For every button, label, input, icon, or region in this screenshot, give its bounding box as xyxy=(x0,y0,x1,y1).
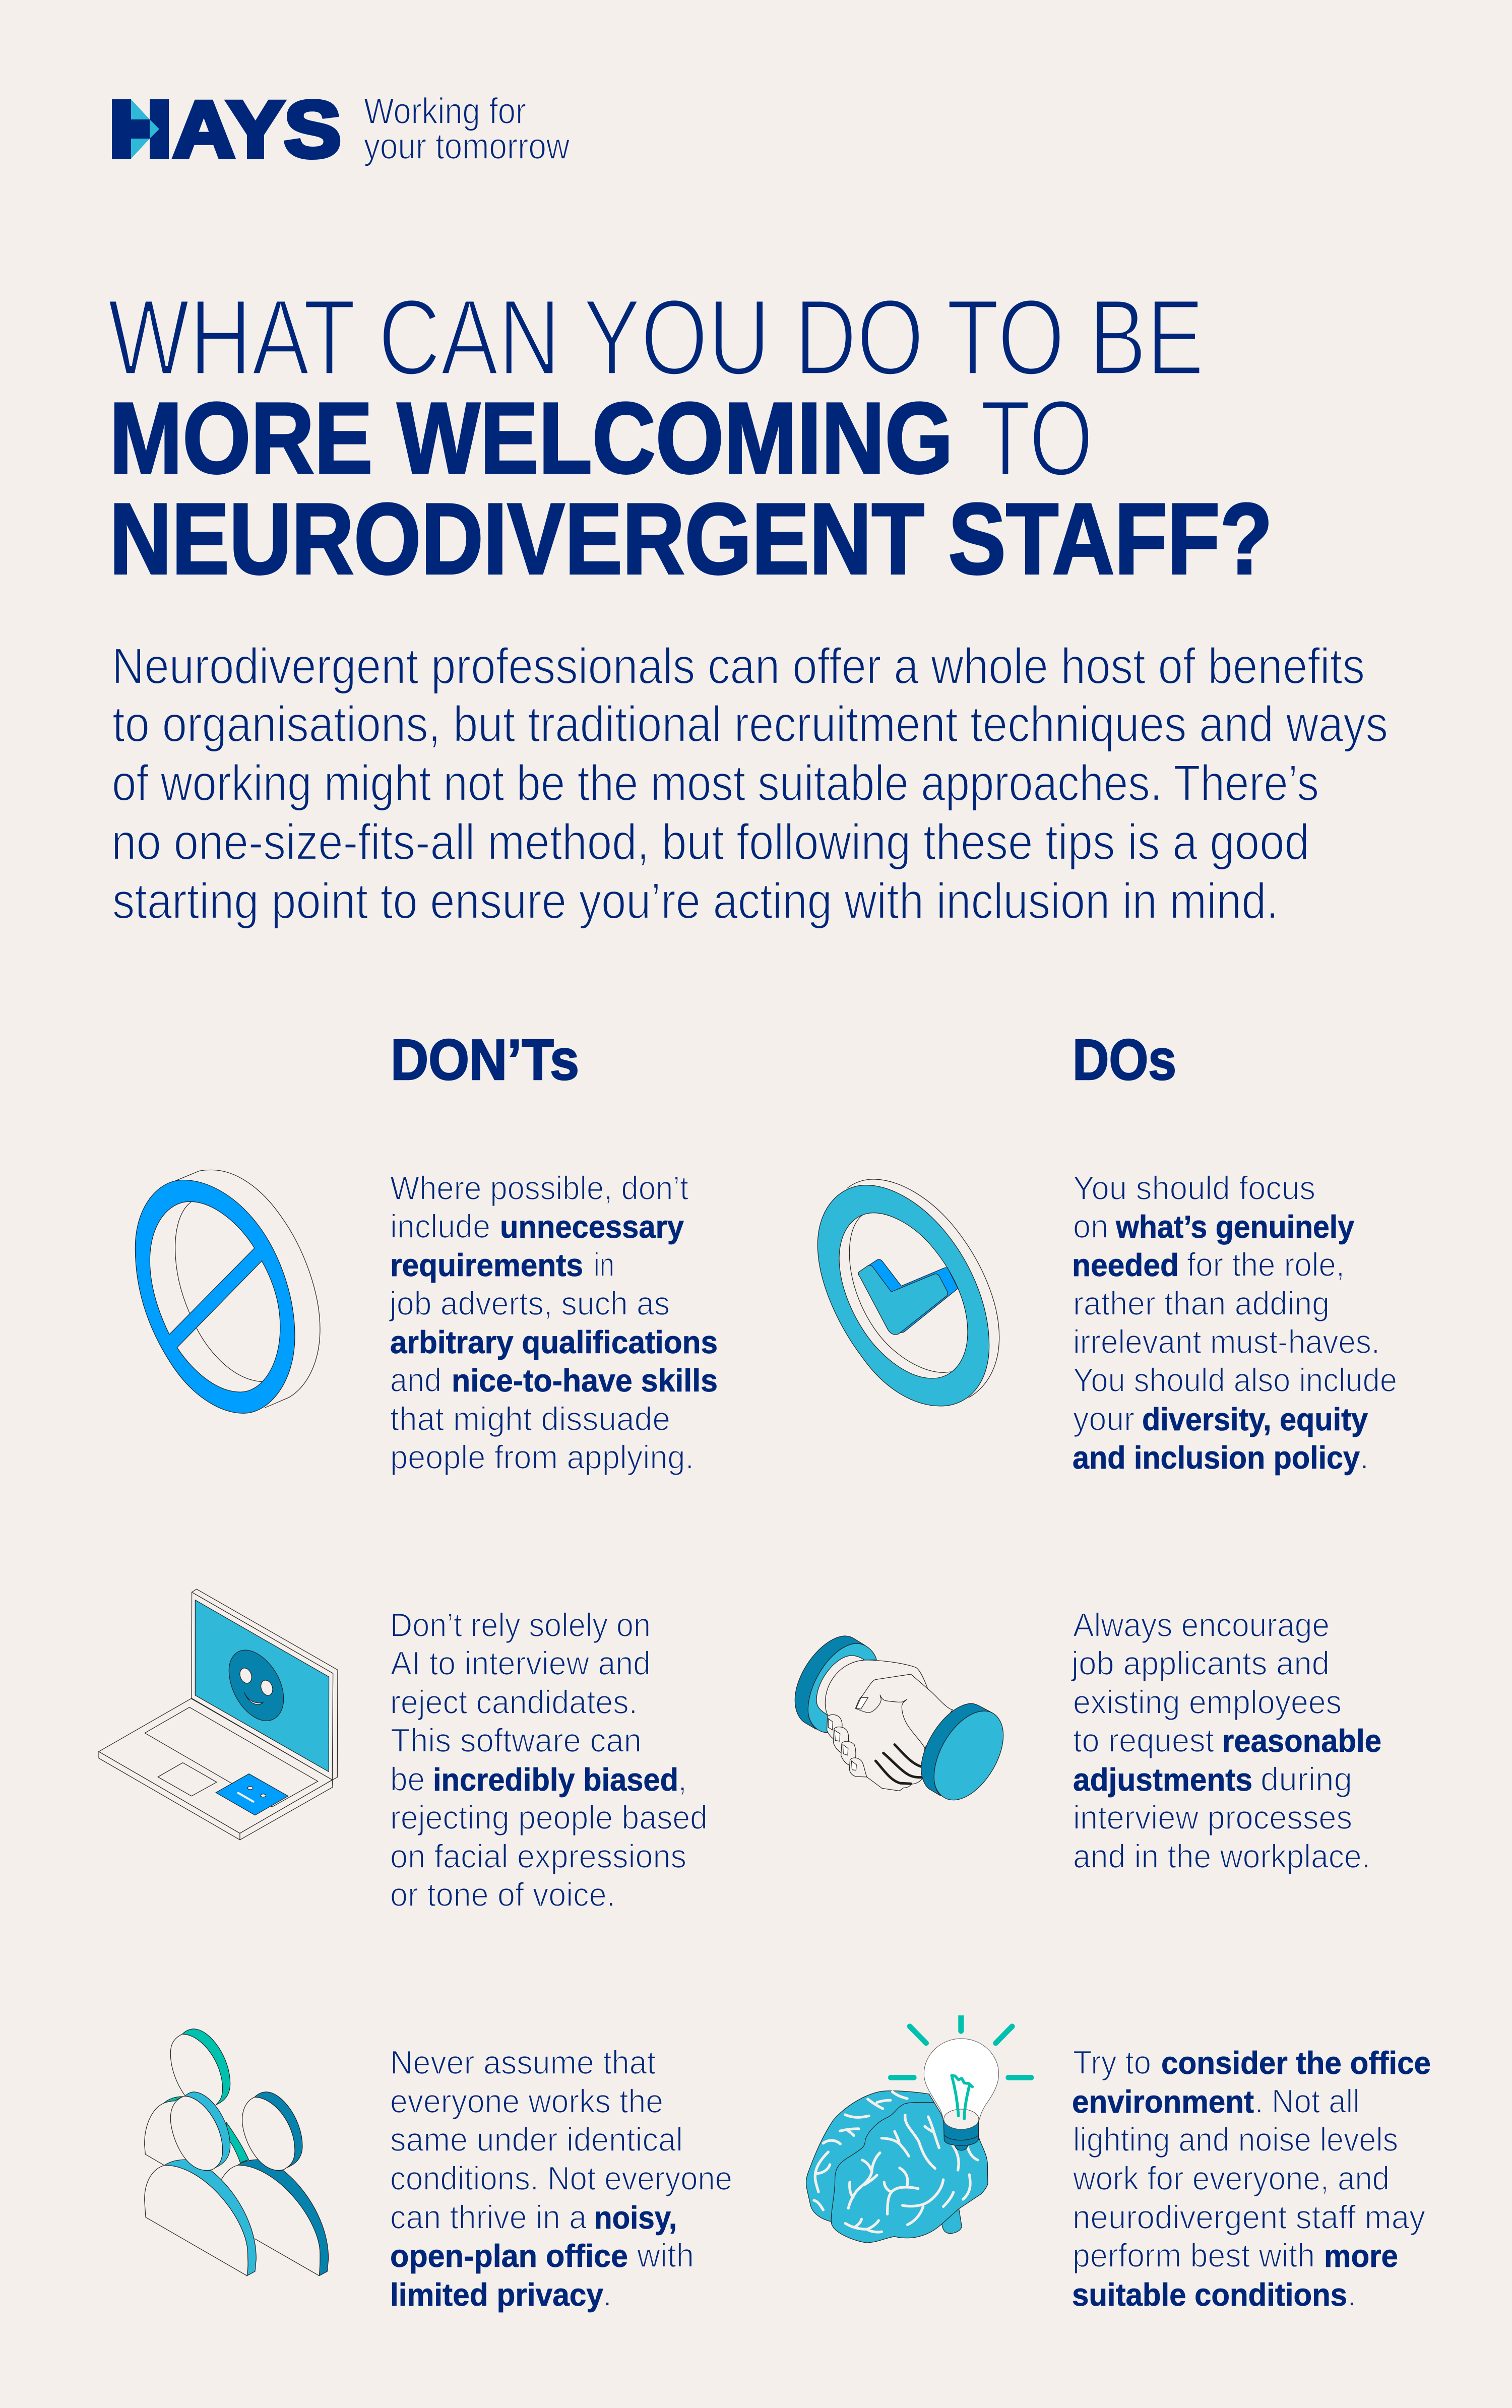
text: do 1: You should also include xyxy=(1073,1362,1397,1399)
text: don't 1: that might dissuade xyxy=(390,1401,670,1437)
text: do 1: needed xyxy=(1072,1248,1179,1283)
text: don't 3: open-plan office xyxy=(390,2239,628,2274)
text: don't 1: and xyxy=(390,1362,442,1399)
logo wordmark: H xyxy=(112,85,169,175)
text: do 1: . xyxy=(1360,1439,1369,1476)
intro paragraph: of working might not be the most suitable approaches. There’s xyxy=(112,755,1319,811)
text: don't 2: be xyxy=(390,1761,425,1798)
text: don't 2: reject candidates. xyxy=(390,1684,638,1721)
text: don't 1: people from applying. xyxy=(390,1439,694,1476)
text: do 3: neurodivergent staff may xyxy=(1073,2199,1425,2236)
text: don't 3: can thrive in a xyxy=(390,2199,587,2236)
text: do 3: perform best with xyxy=(1073,2237,1315,2274)
text: do 2: during xyxy=(1261,1761,1352,1798)
text: do 3: suitable conditions xyxy=(1072,2277,1347,2313)
logo: Hays, working for your tomorrow xyxy=(112,85,570,175)
heading: dos: DOs xyxy=(1073,1028,1176,1092)
text: do 1: rather than adding xyxy=(1073,1285,1330,1322)
text: don't 3: . xyxy=(603,2276,612,2313)
icon: three people xyxy=(145,2029,329,2276)
panel: don't 3, identical conditions xyxy=(145,2029,732,2313)
text: do 3: environment xyxy=(1072,2084,1254,2120)
icon: tick in ring xyxy=(817,1179,999,1406)
text: do 2: existing employees xyxy=(1073,1684,1342,1721)
text: don't 1: arbitrary qualifications xyxy=(390,1325,718,1360)
text: do 1: and inclusion policy xyxy=(1073,1440,1360,1476)
icon: prohibition sign xyxy=(135,1170,320,1413)
text: don't 3: conditions. Not everyone xyxy=(390,2160,732,2197)
text: don't 2: or tone of voice. xyxy=(390,1876,615,1913)
text: don't 3: everyone works the xyxy=(390,2083,663,2120)
light bulb xyxy=(924,2039,999,2150)
text: don't 1: unnecessary xyxy=(500,1210,684,1245)
panel: don't 1, unnecessary requirements xyxy=(135,1170,718,1476)
title xyxy=(108,277,1273,595)
text: do 2: adjustments xyxy=(1073,1762,1252,1798)
text: do 3: Not all xyxy=(1272,2083,1360,2120)
text: do 3: work for everyone, and xyxy=(1073,2160,1390,2197)
text: don't 3: same under identical xyxy=(390,2121,683,2158)
heading: don'ts: DON’Ts xyxy=(391,1028,579,1092)
text: do 2 xyxy=(1070,1607,1381,1875)
text: do 1: on xyxy=(1073,1208,1108,1245)
title: WHAT CAN YOU DO TO BE xyxy=(108,277,1204,398)
text: don't 2: incredibly biased xyxy=(433,1762,678,1798)
title: NEURODIVERGENT STAFF? xyxy=(109,483,1273,595)
logo tagline: your tomorrow xyxy=(364,126,570,167)
text: do 3: more xyxy=(1324,2239,1398,2274)
text: do 3: Try to xyxy=(1073,2044,1151,2081)
panel: do 2, reasonable adjustments xyxy=(795,1607,1381,1875)
text: do 3 xyxy=(1072,2044,1431,2313)
text: don't 1 xyxy=(389,1170,718,1476)
text: don't 2: on facial expressions xyxy=(390,1838,686,1875)
text: do 2: and in the workplace. xyxy=(1073,1838,1370,1875)
text: do 3: . xyxy=(1347,2276,1356,2313)
text: do 3: . xyxy=(1254,2083,1264,2120)
text: don't 2: AI to interview and xyxy=(391,1645,651,1682)
text: don't 1: Where possible, don’t xyxy=(390,1170,688,1207)
text: don't 2: Don’t rely solely on xyxy=(390,1607,651,1643)
text: do 1: irrelevant must-haves. xyxy=(1073,1323,1380,1360)
text: do 2: job applicants and xyxy=(1070,1645,1330,1682)
logo wordmark xyxy=(112,85,341,175)
text: do 1 xyxy=(1072,1170,1397,1476)
text: don't 3: with xyxy=(637,2237,694,2274)
panel: do 1, what's genuinely needed xyxy=(817,1170,1397,1476)
text: don't 1: include xyxy=(390,1208,490,1245)
text: don't 1: job adverts, such as xyxy=(389,1285,670,1322)
logo tagline xyxy=(364,91,570,167)
text: do 1: You should focus xyxy=(1073,1170,1315,1207)
text: don't 3: limited privacy xyxy=(390,2277,603,2313)
text: do 3: consider the office xyxy=(1161,2046,1431,2081)
text: do 3: lighting and noise levels xyxy=(1073,2121,1398,2158)
text: don't 1: nice-to-have skills xyxy=(452,1363,718,1399)
text: don't 2 xyxy=(390,1607,708,1913)
title: TO xyxy=(980,378,1093,498)
text: do 1: for the role, xyxy=(1187,1246,1345,1283)
text: do 2: reasonable xyxy=(1222,1724,1381,1759)
text: do 2: interview processes xyxy=(1073,1799,1352,1836)
text: don't 1: in xyxy=(594,1246,614,1283)
light rays xyxy=(891,2015,1031,2077)
intro paragraph: to organisations, but traditional recruitment techniques and ways xyxy=(112,696,1388,752)
text: don't 2: , xyxy=(678,1761,687,1798)
panel: do 3, office environment xyxy=(806,2015,1431,2313)
text: don't 1: requirements xyxy=(390,1248,583,1283)
text: do 2: to request xyxy=(1073,1722,1214,1759)
icon: laptop with faces xyxy=(99,1589,338,1840)
text: do 1: your xyxy=(1073,1401,1135,1437)
icon: handshake xyxy=(795,1636,1003,1800)
text: don't 2: This software can xyxy=(391,1722,642,1759)
panel: don't 2, AI interviewing xyxy=(99,1589,708,1913)
text: do 1: what’s genuinely xyxy=(1115,1210,1354,1245)
intro paragraph: no one-size-fits-all method, but following these tips is a good xyxy=(111,814,1309,870)
text: don't 2: rejecting people based xyxy=(390,1799,708,1836)
text: don't 3: Never assume that xyxy=(390,2044,656,2081)
text: do 2: Always encourage xyxy=(1073,1607,1330,1643)
text: don't 3: noisy, xyxy=(594,2200,677,2236)
text: do 1: diversity, equity xyxy=(1142,1402,1368,1437)
logo wordmark: AYS xyxy=(173,85,341,174)
text: don't 3 xyxy=(390,2044,732,2313)
intro paragraph: Neurodivergent professionals can offer a whole host of benefits xyxy=(112,638,1365,694)
intro paragraph: starting point to ensure you’re acting with inclusion in mind. xyxy=(112,873,1279,929)
logo tagline: Working for xyxy=(364,91,526,132)
title: MORE WELCOMING xyxy=(109,382,953,494)
intro paragraph xyxy=(111,638,1388,929)
icon: brain with light bulb xyxy=(806,2015,1031,2243)
